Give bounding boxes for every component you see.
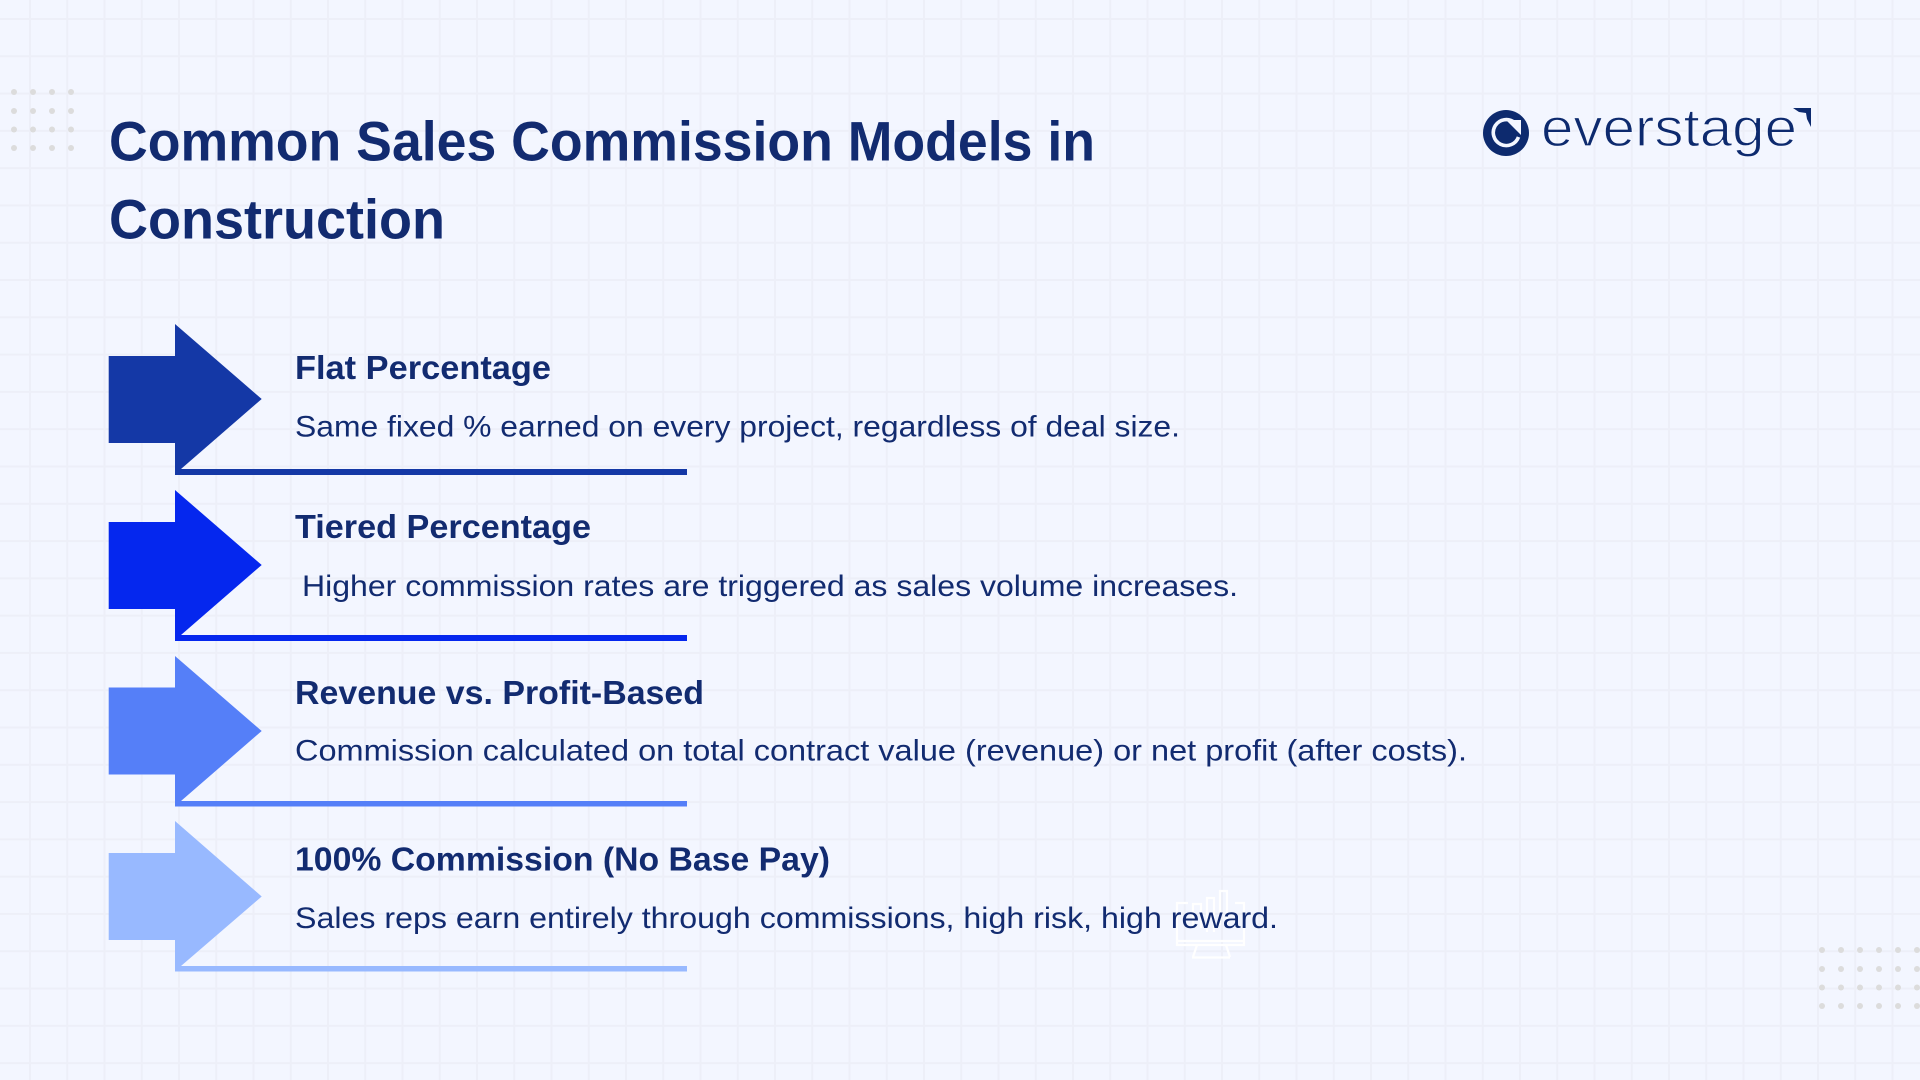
description: 100% commission: Sales reps earn entirely through commissions, high risk, high reward. — [295, 902, 1278, 935]
decorative dot grid: top left — [11, 89, 74, 151]
row 4: 100% commission — [109, 821, 1278, 972]
logo icon — [1483, 110, 1529, 156]
row 2: tiered percentage — [109, 490, 1238, 641]
heading: tiered percentage: Tiered Percentage — [295, 509, 591, 546]
heading: flat percentage: Flat Percentage — [295, 350, 551, 387]
title: Common Sales Commission Models in — [109, 110, 1095, 172]
logo wordmark: everstage — [1541, 98, 1797, 158]
row 3: revenue vs profit-based — [109, 656, 1467, 806]
row 1: flat percentage — [109, 324, 1180, 475]
description: revenue vs profit-based: Commission calculated on total contract value (revenue) or net profit (after costs). — [295, 734, 1467, 768]
arrow: 100% commission — [109, 821, 687, 972]
title: Construction — [109, 188, 445, 250]
heading: revenue vs profit-based: Revenue vs. Profit-Based — [295, 675, 704, 712]
arrow: flat percentage — [109, 324, 687, 475]
arrow: tiered percentage — [109, 490, 687, 641]
logo corner mark — [1793, 108, 1811, 127]
logo: everstage — [1483, 98, 1811, 158]
icon: faint monitor with bar chart — [1177, 891, 1244, 958]
description: tiered percentage: Higher commission rates are triggered as sales volume increases. — [302, 570, 1238, 603]
title — [109, 110, 1095, 250]
heading: 100% commission: 100% Commission (No Base Pay) — [295, 842, 830, 878]
description: flat percentage: Same fixed % earned on every project, regardless of deal size. — [295, 410, 1180, 444]
decorative dot grid: bottom right — [1819, 947, 1920, 1009]
arrow: revenue vs profit-based — [109, 656, 687, 806]
